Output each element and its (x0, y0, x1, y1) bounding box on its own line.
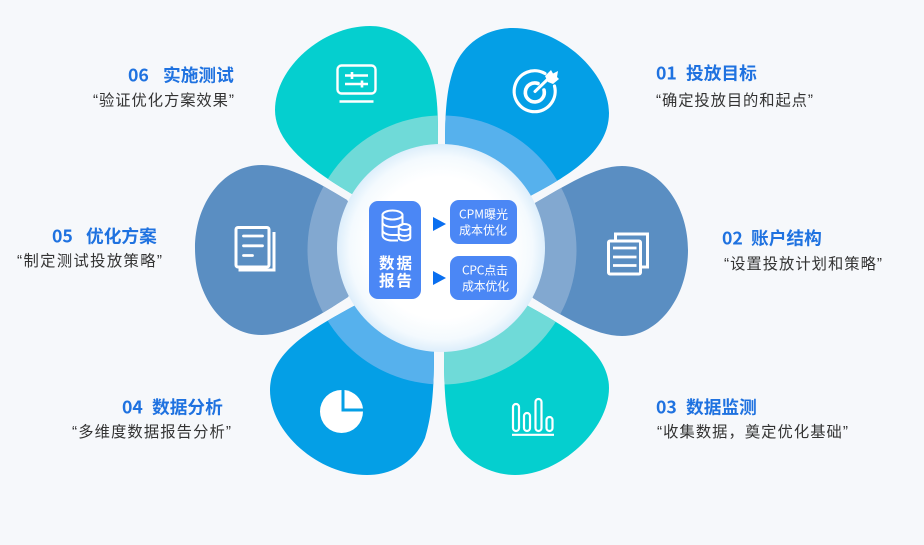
icon: pie chart (320, 390, 363, 433)
box: CPC: 成本优化 (462, 278, 509, 294)
label 05: 05 (52, 222, 73, 248)
central circle (337, 144, 545, 352)
arrow: to CPM (433, 217, 446, 231)
box: CPM (450, 200, 517, 244)
label 06: 06 (128, 62, 149, 88)
label 05: “制定测试投放策略” (17, 253, 162, 270)
label 04: 数据分析 (152, 394, 223, 420)
label 05 (17, 222, 162, 270)
label: data report: 数据 (379, 252, 414, 274)
label 04: 04 (122, 394, 143, 420)
label 06: 实施测试 (163, 62, 234, 88)
icon: database (382, 210, 410, 240)
petal 01 (445, 28, 609, 213)
box: CPC: CPC点击 (462, 262, 508, 278)
label 01 (656, 60, 813, 110)
petal 02 (510, 166, 688, 336)
icon: documents left (236, 228, 274, 270)
label 03: 数据监测 (686, 394, 757, 420)
box: CPM: CPM曝光 (459, 206, 508, 222)
label 01: 投放目标 (686, 60, 757, 86)
label 06 (93, 62, 234, 110)
label 01: 01 (656, 60, 677, 86)
label 03: 03 (656, 394, 677, 420)
box: CPM: 成本优化 (459, 222, 507, 238)
label: data report: 报告 (379, 269, 414, 291)
icon: bar chart (512, 399, 554, 435)
icon: target (514, 70, 559, 112)
label 02: 02 (722, 224, 743, 250)
petal 05 (195, 165, 375, 335)
petal 04 (270, 290, 434, 475)
petal 06 (275, 26, 438, 213)
icon: documents right (608, 234, 648, 274)
label 04 (72, 394, 231, 441)
arrow: to CPC (433, 271, 446, 285)
label 02: 账户结构 (751, 224, 822, 250)
petal 03 (444, 290, 609, 475)
panel: data report (369, 201, 421, 299)
label 04: “多维度数据报告分析” (72, 424, 231, 441)
icon: settings screen (338, 66, 376, 102)
box: CPC (450, 256, 517, 300)
label 03 (656, 394, 848, 441)
label 02: “设置投放计划和策略” (724, 256, 882, 273)
label 02 (722, 224, 882, 273)
label 01: “确定投放目的和起点” (656, 92, 813, 110)
label 06: “验证优化方案效果” (93, 92, 234, 110)
translucent ring (308, 116, 576, 384)
label 03: “收集数据，奠定优化基础” (657, 424, 848, 441)
label: data report (379, 252, 414, 291)
label 05: 优化方案 (86, 222, 157, 248)
